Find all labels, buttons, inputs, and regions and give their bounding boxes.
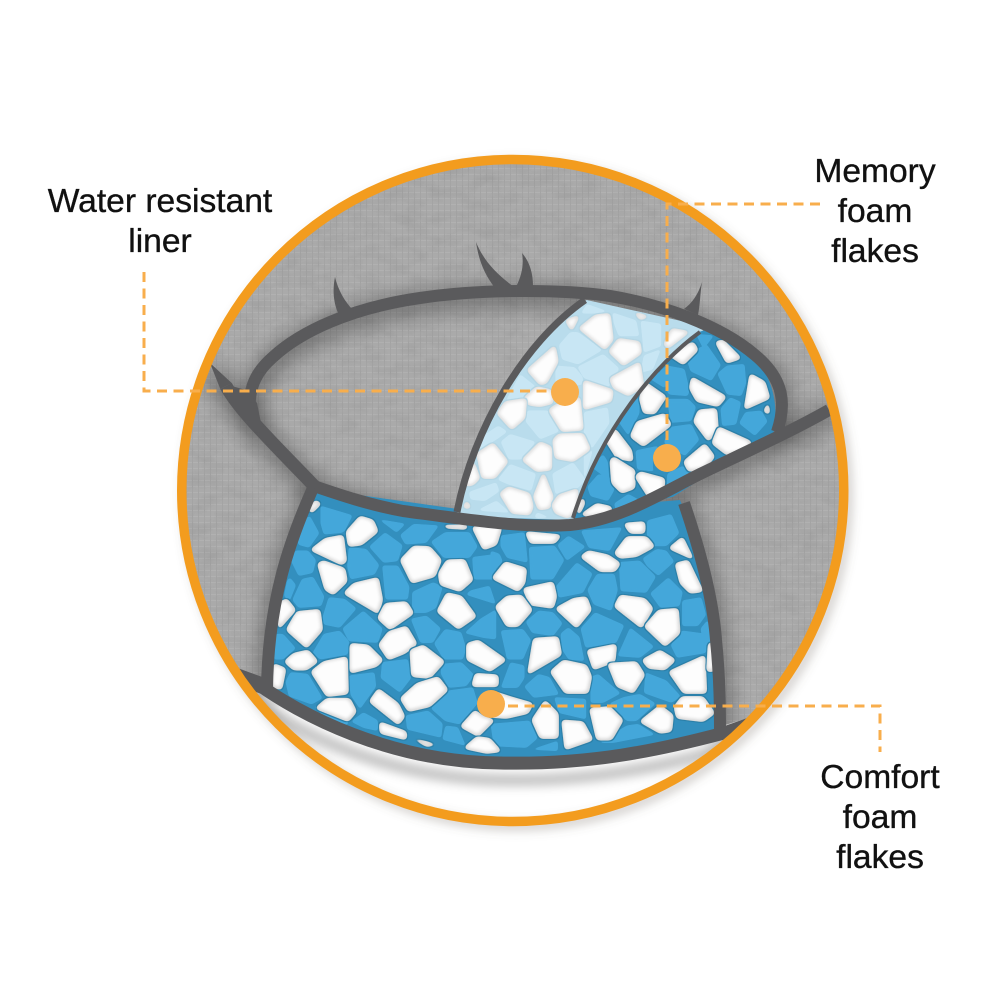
shadow under bottom seam on white xyxy=(240,690,730,780)
soft shadows around seams xyxy=(215,296,829,738)
leader line xyxy=(508,706,880,752)
dark seam outlines xyxy=(226,291,829,763)
ring shadow xyxy=(186,164,848,826)
heading: foam xyxy=(838,193,912,230)
memory foam flakes section xyxy=(576,330,776,517)
heading: Comfort xyxy=(820,759,940,796)
marker dot xyxy=(653,444,681,472)
callout: water resistant liner xyxy=(48,183,579,406)
callout: comfort foam flakes xyxy=(477,690,940,876)
body right xyxy=(684,503,720,736)
water resistant liner section (pale flakes) xyxy=(457,300,704,520)
divider xyxy=(457,300,585,512)
callout: memory foam flakes xyxy=(653,153,936,472)
lens edge xyxy=(573,332,700,518)
leader line xyxy=(144,272,548,391)
blue cells xyxy=(273,505,712,752)
white cells xyxy=(577,340,770,517)
body left xyxy=(267,488,313,690)
heading: foam xyxy=(843,799,917,836)
heading: Memory xyxy=(814,153,936,190)
left branch xyxy=(226,386,317,489)
pale section white flakes xyxy=(463,312,690,518)
marker dot xyxy=(551,378,579,406)
blue cells xyxy=(587,333,768,513)
gray fabric background xyxy=(186,164,839,792)
leader line xyxy=(667,204,820,440)
orange ring xyxy=(182,160,844,822)
seam tips and stitch spikes xyxy=(210,242,750,741)
comfort foam flakes body xyxy=(273,494,714,757)
heading: flakes xyxy=(831,233,919,270)
pillow lower seam xyxy=(311,410,829,526)
body bottom xyxy=(255,682,724,763)
heading: Water resistant xyxy=(48,183,273,220)
white cells xyxy=(272,500,715,753)
heading: flakes xyxy=(836,839,924,876)
pillow top opening xyxy=(250,291,782,432)
marker dot xyxy=(477,690,505,718)
panel: circular detail view xyxy=(150,150,880,826)
heading: liner xyxy=(128,223,192,260)
